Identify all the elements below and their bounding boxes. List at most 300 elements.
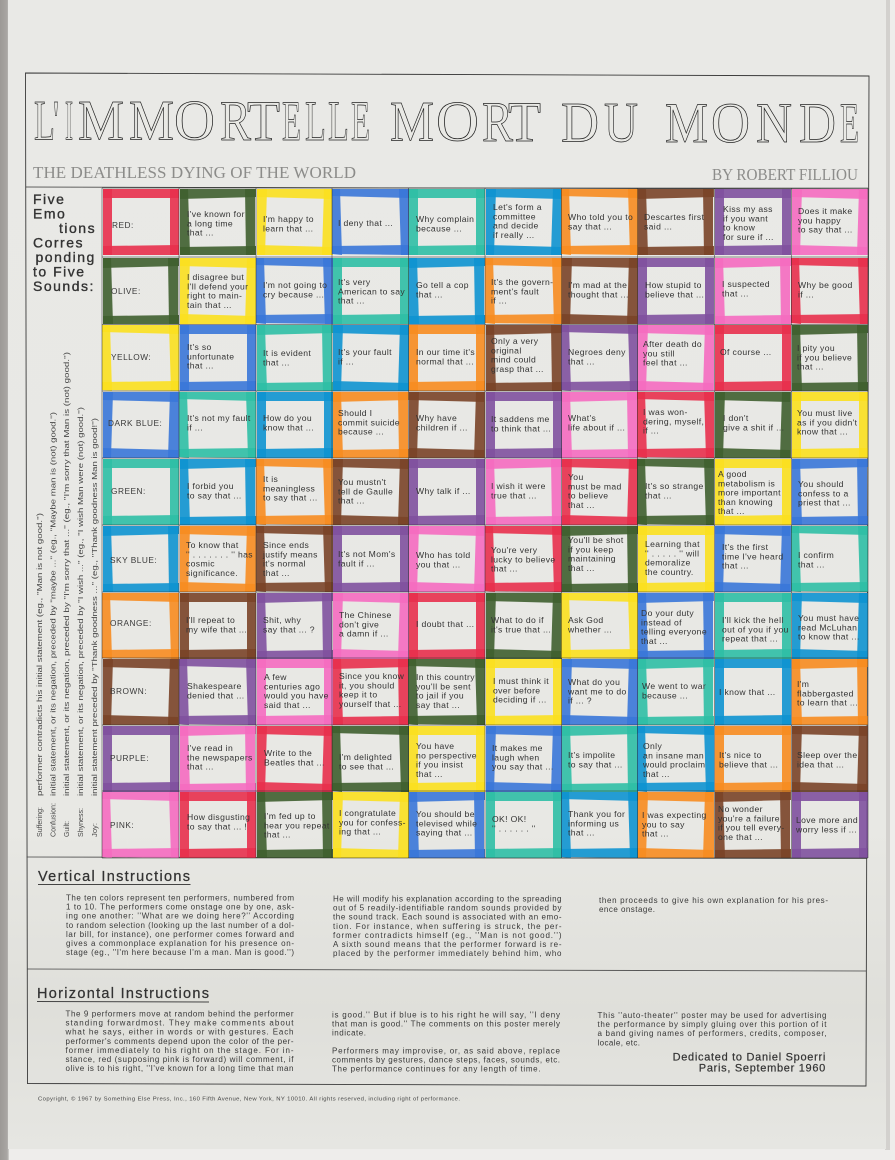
- tile: Since ends justify: that ...: [263, 568, 290, 578]
- tile: You must be mad: You: [568, 472, 584, 482]
- dedication: Paris, September 1960: [699, 1062, 826, 1074]
- title: D: [799, 92, 836, 155]
- tile: What do you want: What do you: [568, 677, 620, 687]
- tile: Shakespeare: Shakespeare: [187, 681, 242, 691]
- tile: You'll be shot: maintaining: [568, 554, 616, 564]
- tile: You're very lucky: that ...: [491, 564, 518, 574]
- tile: A good metabolism: more important: [718, 488, 781, 498]
- tile: It's not Mom's: [333, 526, 409, 592]
- tile: Sleep over the: idea that ...: [797, 759, 844, 769]
- tile: A few centuries: A few: [264, 672, 287, 682]
- tile: You must have read McLuhan: read McLuhan: [798, 622, 857, 632]
- tile: Negroes deny: [561, 325, 638, 391]
- tile: To know that: '' . . . . . . . '' has: [186, 549, 253, 559]
- title: T: [508, 91, 541, 154]
- tile: In this country: to jail if you: [416, 691, 464, 701]
- tile: I must think it: over before: [493, 685, 540, 695]
- tile: A few centuries: said that ...: [264, 700, 311, 710]
- tile: You're very lucky: lucky to believe: [491, 554, 556, 564]
- tile: Thank you for: informing us: [568, 818, 619, 828]
- tile: Love more and: [792, 792, 868, 858]
- tile: In our time: normal that ...: [416, 356, 474, 366]
- tile: Why complain: [409, 189, 485, 255]
- tile: I'm not going to: [256, 258, 333, 324]
- tile: You have no perspective: that ...: [416, 769, 443, 779]
- tile: You're very lucky: You're very: [491, 545, 538, 555]
- tile: Ask God: [561, 593, 638, 659]
- tile: Only a very original: grasp that ...: [491, 364, 544, 374]
- tile: I've read in: [180, 726, 256, 792]
- tile: Descartes first: Descartes first: [644, 212, 705, 222]
- tile: It is meaningless: meaningless: [263, 483, 315, 493]
- horizontal instructions: column 3: the performance by simply gluing over this portion of it: [598, 1020, 827, 1029]
- tile: Do your duty: [638, 593, 714, 659]
- tile: You mustn't tell: [333, 459, 409, 525]
- tile: Should I commit: [333, 392, 409, 458]
- tile: It saddens me: to think that ...: [491, 423, 551, 433]
- tile: Sleep over the: Sleep over the: [797, 750, 857, 760]
- vertical legend: five emotions: initial statement preceded by ''Thank goodness ...'' (eg., ''Thank goodness Man is good!''): [90, 417, 99, 796]
- vertical instructions: column 1: stage (eg., ''I'm here because I'm a man. Man is good.''): [66, 948, 294, 957]
- tile: YELLOW: YELLOW:: [111, 352, 151, 362]
- tile: It's so strange: [637, 459, 714, 525]
- tile: It's nice to: [715, 726, 791, 792]
- tile: It is evident: It is evident: [263, 348, 311, 358]
- tile: Why have children: Why have: [416, 413, 457, 423]
- vertical instructions: column 2: out of 5 readily-identifiable random sounds provided by: [333, 904, 562, 913]
- tile: I'll repeat to: I'll repeat to: [186, 615, 235, 625]
- tile: It saddens me: It saddens me: [491, 414, 550, 424]
- tile: In our time: In our time it's: [416, 347, 475, 357]
- tile: I must think it: I must think it: [493, 676, 549, 686]
- tile: Love more and: Love more and: [796, 815, 858, 825]
- tile: I pity you: that ...: [797, 362, 824, 372]
- tile: Should I commit: Should I: [338, 408, 372, 418]
- tile: I'm flabbergasted: [792, 659, 868, 725]
- tile: No wonder: [715, 792, 791, 858]
- tile: It makes me laugh: [486, 726, 562, 792]
- tile: I pity you: I pity you: [797, 343, 835, 353]
- tile: DARK BLUE: DARK BLUE:: [108, 418, 162, 428]
- tile: What's life about: life about if ...: [568, 422, 625, 432]
- tile: Learning that: '' . . . . . '' will: [645, 548, 699, 558]
- tile: It's the first: [715, 526, 791, 592]
- tile: Descartes first: said ...: [644, 221, 672, 231]
- title: M: [390, 90, 434, 154]
- tile: Of course: [715, 325, 791, 391]
- tile: I'm mad at the thought: I'm mad at the: [568, 280, 627, 290]
- tile: I'm delighted: I'm delighted: [339, 752, 392, 762]
- subtitle: THE DEATHLESS DYING OF THE WORLD: [33, 163, 356, 182]
- tile: We went to war: because ...: [642, 690, 688, 700]
- tile: To know that: To know that: [186, 540, 239, 550]
- tile: YELLOW: [102, 325, 179, 391]
- vertical legend: five emotions: Joy:: [90, 823, 99, 837]
- author: BY ROBERT FILLIOU: [712, 165, 858, 184]
- tile: You should confess: [792, 459, 868, 525]
- tile: I doubt that: [409, 593, 485, 659]
- horizontal instructions: column 2: Performers may improvise, or, as said above, replace: [332, 1046, 561, 1055]
- tile: I'm mad at the thought: thought that ...: [568, 289, 629, 299]
- frame edge: left shadow: [0, 0, 9, 1160]
- vertical legend: five emotions: performer contradicts his initial statement (eg., ''Man is not good.''): [35, 512, 44, 796]
- tile: It's impolite: It's impolite: [568, 750, 615, 760]
- title: O: [174, 90, 215, 152]
- side heading: [33, 191, 96, 294]
- tile: I'm fed up to: [257, 792, 333, 858]
- tile: It's the first: time I've heard: [722, 551, 784, 561]
- tile: I've known for: a long time: [187, 218, 233, 228]
- tile: Go tell a cop: [409, 258, 485, 324]
- tile: A good metabolism: that ...: [718, 506, 745, 516]
- tile: What's life about: [562, 392, 638, 458]
- tile: I wish it were: [486, 459, 562, 525]
- tile: GREEN: GREEN:: [111, 486, 146, 496]
- tile: I congratulate: you for confess-: [339, 817, 406, 827]
- tile: No wonder: if you tell every-: [718, 823, 785, 833]
- tile: The Chinese: don't give: [339, 619, 379, 629]
- tile: I deny that: I deny that ...: [338, 218, 393, 228]
- tile: I pity you: if you believe: [797, 352, 852, 362]
- tile: What's life about: What's: [568, 413, 596, 423]
- tile: Go tell a cop: Go tell a cop: [416, 280, 469, 290]
- tile: It makes me laugh: you say that ...: [492, 762, 554, 772]
- tile: It's the government's fault: ment's fault: [491, 286, 539, 296]
- tile: I'm not going to: cry because ...: [263, 289, 324, 299]
- tile: A few centuries: would you have: [263, 691, 329, 701]
- tile: I'm delighted: [332, 726, 409, 792]
- title: T: [247, 90, 280, 153]
- horizontal instructions: column 2: The performance continues for any length of time.: [332, 1064, 540, 1074]
- tile: Why be good: Why be good: [798, 280, 853, 290]
- tile: Only a very original: Only a very: [491, 336, 539, 346]
- tile: Let's form a committee: Let's form a: [493, 202, 542, 212]
- tile: It's so unfortunate: that ...: [187, 361, 214, 371]
- tile: I disagree but: [180, 258, 256, 324]
- divider: between instructions: [27, 969, 866, 971]
- title: E: [282, 90, 301, 153]
- tile: It's your fault: It's your fault: [338, 347, 392, 357]
- tile: ORANGE: ORANGE:: [110, 618, 152, 628]
- horizontal instructions: column 2: [332, 1010, 561, 1074]
- tile: Let's form a committee: and decide: [493, 221, 539, 231]
- tile: OLIVE: [103, 258, 179, 324]
- tile: How do you know: know that ...: [263, 422, 314, 432]
- tile: I'm happy to: [257, 189, 333, 255]
- tile: After death: [638, 325, 714, 391]
- horizontal instructions: column 3: locale, etc.: [598, 1038, 640, 1047]
- tile: It's nice to: believe that ...: [719, 759, 778, 769]
- side heading: to Five: [33, 264, 86, 280]
- tile: We went to war: [638, 659, 714, 725]
- tile: How disgusting: How disgusting: [187, 812, 250, 822]
- tile: I must think it: deciding if ...: [493, 695, 547, 705]
- tile: Who has told: Who has told: [416, 550, 470, 560]
- tile: You're very lucky: [485, 526, 562, 592]
- tile: How stupid to: How stupid to: [645, 280, 702, 290]
- tile: You should be televised: You should be: [416, 809, 475, 819]
- tile: Who has told: [409, 526, 485, 592]
- tile: Shit, why: Shit, why: [263, 615, 301, 625]
- tile: It's so strange: It's so strange: [645, 481, 704, 491]
- tile: Only an insane man: [637, 726, 714, 792]
- tile: I'm happy to: I'm happy to: [263, 214, 314, 224]
- vertical legend: five emotions: [35, 351, 99, 837]
- title: E: [840, 92, 859, 155]
- colour grid: [102, 189, 868, 858]
- tile: Kiss my ass: if you want: [723, 213, 768, 223]
- tile: You should confess: You should: [798, 479, 844, 489]
- tile: It's not my fault: It's not my fault: [187, 413, 251, 423]
- tile: Only an insane man: an insane man: [643, 750, 704, 760]
- heading: Horizontal Instructions: Horizontal Instructions: [37, 986, 209, 1002]
- tile: Why be good: [791, 258, 868, 324]
- horizontal instructions: column 1: performer's comments depend upon the color of the per-: [66, 1037, 294, 1046]
- horizontal instructions: column 2: is good.'' But if blue is to his right he will say, ''I deny: [332, 1010, 560, 1020]
- tile: I congratulate: ing that ...: [339, 827, 381, 837]
- tile: You mustn't tell: that ...: [338, 496, 365, 506]
- tile: It makes me laugh: It makes me: [492, 743, 543, 753]
- title: D: [561, 92, 599, 154]
- tile: In this country: say that ...: [416, 700, 460, 710]
- tile: You mustn't tell: You mustn't: [338, 477, 387, 487]
- tile: Do your duty: instead of: [641, 617, 682, 627]
- tile: How disgusting: [180, 792, 256, 858]
- tile: After death: feel that ...: [643, 358, 688, 368]
- tile: Do your duty: Do your duty: [641, 608, 694, 618]
- tile: A few centuries: [257, 659, 333, 725]
- tile: I wish it were: I wish it were: [491, 481, 546, 491]
- tile: It is evident: [257, 325, 333, 391]
- tile: It's so unfortunate: [180, 325, 256, 391]
- title: O: [711, 92, 750, 155]
- tile: I'm mad at the thought: [562, 258, 638, 324]
- vertical legend: five emotions: initial statement, or its negation, preceded by ''maybe ...'' (eg., ''Maybe man is (not) good.''): [48, 411, 58, 796]
- tile: What to do if: it's true that ...: [491, 624, 551, 634]
- vertical instructions: column 3: ence onstage.: [599, 905, 655, 914]
- horizontal instructions: column 1: standing forwardmost. They make comments about: [66, 1019, 294, 1028]
- tile: How do you know: [257, 392, 333, 458]
- tile: It's very American: It's very: [338, 277, 371, 287]
- tile: Since you know: keep it to: [339, 690, 377, 700]
- tile: You should be televised: saying that ...: [416, 828, 473, 838]
- vertical instructions: column 2: placed by the performer immediately behind him, who: [333, 949, 562, 958]
- side heading: Sounds:: [33, 278, 95, 294]
- tile: I forbid you: I forbid you: [187, 481, 234, 491]
- tile: Shit, why: [257, 593, 333, 659]
- vertical instructions: column 1: ing one another: ''What are we doing here?'' According: [66, 912, 294, 921]
- tile: I was wondering: dering, myself,: [643, 416, 704, 426]
- tile: You mustn't tell: tell de Gaulle: [338, 486, 393, 496]
- tile: It is meaningless: to say that ...: [263, 493, 318, 503]
- horizontal instructions: column 1: stance, red (supposing pink is forward) will comment, if: [66, 1055, 294, 1064]
- title: M: [78, 90, 124, 152]
- horizontal instructions: column 1: The 9 performers move at random behind the performer: [66, 1010, 294, 1018]
- tile: Love more and: worry less if ...: [795, 824, 857, 834]
- dedication: Dedicated to Daniel Spoerri: [673, 1052, 826, 1064]
- tile: RED: RED:: [112, 220, 134, 230]
- tile: It's very American: American to say: [338, 286, 405, 296]
- tile: I'll repeat to: [180, 593, 256, 659]
- title: R: [482, 91, 513, 154]
- tile: It's your fault: if ...: [338, 356, 354, 366]
- vertical legend: five emotions: initial statement, or its negation, preceded by ''I wish ...'' (eg., ''I wish Man were (not) good.''): [76, 406, 85, 796]
- tile: I've read in: I've read in: [187, 743, 233, 753]
- tile: You'll be shot: if you keep: [568, 544, 614, 554]
- title: L: [328, 90, 349, 153]
- tile: Kiss my ass: [715, 189, 791, 255]
- tile: How stupid to: [638, 258, 714, 324]
- tile: I forbid you: [180, 459, 256, 525]
- title: R: [220, 90, 251, 153]
- tile: You should be televised: [409, 792, 485, 858]
- tile: You have no perspective: You have: [416, 741, 454, 751]
- tile: Thank you for: that ...: [568, 828, 595, 838]
- vertical instructions: column 3: [599, 896, 828, 914]
- tile: Do your duty: telling everyone: [641, 627, 707, 637]
- tile: I forbid you: to say that ...: [187, 490, 242, 500]
- tile: PURPLE: [103, 726, 179, 792]
- tile: In this country: In this country: [416, 672, 475, 682]
- tile: Should I commit: because ...: [338, 427, 384, 437]
- tile: It makes me laugh: laugh when: [492, 752, 540, 762]
- tile: Descartes first: [638, 189, 714, 255]
- tile: Of course: Of course ...: [720, 347, 771, 357]
- tile: Shakespeare: [179, 659, 256, 725]
- tile: Thank you for: Thank you for: [568, 809, 625, 819]
- tile: It is evident: that ...: [263, 357, 290, 367]
- tile: What do you want: want me to do: [567, 686, 627, 696]
- tile: It's impolite: to say that ...: [568, 759, 623, 769]
- title: L: [34, 90, 55, 152]
- vertical instructions: column 1: 1 to 10. The performers come onstage one by one, ask-: [66, 903, 294, 912]
- tile: Why have children: [409, 392, 485, 458]
- tile: Only a very original: original: [491, 345, 522, 355]
- horizontal instructions: column 2: that man is good.'' The comments on this poster merely: [332, 1020, 560, 1029]
- tile: I was expecting: you to say: [642, 819, 685, 829]
- tile: OK! OK!: [486, 792, 562, 858]
- tile: ORANGE: [102, 593, 179, 659]
- vertical instructions: column 1: gives a commonplace explanation for his presence on-: [66, 939, 294, 948]
- tile: You must live: You must live: [797, 408, 852, 418]
- tile: I was wondering: [637, 392, 714, 458]
- tile: Since you know: [333, 659, 409, 725]
- tile: How do you know: How do you: [263, 413, 312, 423]
- vertical instructions: column 1: [66, 894, 294, 957]
- tile: Why complain: Why complain: [416, 214, 474, 224]
- tile: You must live: [792, 392, 868, 458]
- tile: It's not Mom's: fault if ...: [338, 558, 375, 568]
- tile: It's not Mom's: It's not Mom's: [338, 549, 396, 559]
- tile: It is meaningless: It is: [263, 474, 278, 484]
- tile: PURPLE: PURPLE:: [110, 753, 149, 763]
- horizontal instructions: column 3: [598, 1011, 827, 1047]
- tile: After death: you still: [643, 348, 675, 358]
- tile: After death: After death do: [643, 339, 702, 349]
- tile: I know that: I know that ...: [719, 687, 776, 697]
- side heading: Emo: [33, 206, 66, 222]
- tile: You have no perspective: if you insist: [416, 760, 463, 770]
- tile: Only an insane man: would proclaim: [642, 760, 705, 770]
- tile: You should be televised: televised while: [416, 818, 477, 828]
- tile: It is meaningless: [256, 459, 333, 525]
- tile: Kiss my ass: Kiss my ass: [723, 204, 773, 214]
- tile: It's so unfortunate: It's so: [187, 342, 212, 352]
- tile: I've known for: I've known for: [187, 209, 245, 219]
- tile: I'm fed up to: I'm fed up to: [264, 811, 316, 821]
- tile: To know that: [180, 526, 256, 592]
- tile: Since ends justify: justify means: [262, 549, 318, 559]
- side heading: Corres: [33, 234, 84, 250]
- vertical legend: five emotions: Suffering:: [35, 807, 44, 837]
- tile: It's the first: It's the first: [722, 542, 769, 552]
- tile: I don't give: I don't: [723, 413, 749, 423]
- vertical legend: five emotions: Guilt:: [62, 821, 71, 837]
- dedication: [673, 1052, 826, 1074]
- horizontal instructions: column 1: former immediately to his right on the stage. For in-: [66, 1046, 294, 1055]
- tile: You must be mad: [562, 459, 638, 525]
- tile: A few centuries: centuries ago: [264, 681, 320, 691]
- tile: Ask God: Ask God: [568, 615, 603, 625]
- tile: What do you want: if ... ?: [568, 696, 592, 706]
- vertical legend: five emotions: initial statement, or its negation, preceded by ''I'm sorry that ...'' (eg., ''I'm sorry that Man is (not) good.''): [62, 351, 71, 796]
- tile: It's so unfortunate: unfortunate: [187, 351, 234, 361]
- tile: A good metabolism: than knowing: [718, 497, 773, 507]
- tile: Why talk if: Why talk if ...: [416, 486, 471, 496]
- tile: To know that: cosmic: [186, 559, 215, 569]
- tile: I'm fed up to: hear you repeat: [264, 820, 330, 830]
- tile: OLIVE: OLIVE:: [111, 286, 141, 296]
- tile: Does it make: you happy: [798, 215, 841, 225]
- tile: I confirm: [791, 526, 868, 592]
- tile: DARK BLUE: [103, 392, 179, 458]
- tile: It's the government's fault: [485, 258, 562, 324]
- tile: The Chinese: The Chinese: [339, 610, 392, 620]
- vertical instructions: column 2: [333, 894, 562, 958]
- tile: Why be good: if ...: [798, 289, 814, 299]
- tile: I confirm: that ...: [798, 559, 825, 569]
- tile: I suspected: I suspected: [722, 279, 770, 289]
- title: M: [665, 92, 708, 155]
- title: U: [604, 92, 638, 154]
- copyright: Copyright, © 1967 by Something Else Press, Inc., 160 Fifth Avenue, New York, NY 10010. All rights reserved, including right of performance.: [38, 1096, 460, 1102]
- tile: Who told you to: [561, 189, 638, 255]
- tile: Does it make: [792, 189, 868, 255]
- tile: You must have read McLuhan: You must have: [798, 613, 859, 623]
- tile: The Chinese: a damn if ...: [339, 629, 389, 639]
- tile: Do your duty: that ...: [641, 636, 668, 646]
- tile: It's nice to: It's nice to: [719, 750, 762, 760]
- tile: I was expecting: [638, 792, 714, 858]
- frame edge: right shadow: [885, 0, 890, 1150]
- tile: It's so strange: that ...: [645, 490, 672, 500]
- tile: You must be mad: must be mad: [568, 481, 622, 491]
- tile: I'll repeat to: my wife that ...: [186, 624, 247, 634]
- horizontal instructions: column 1: [64, 1010, 294, 1073]
- tile: It's your fault: [333, 325, 409, 391]
- tile: I'm fed up to: that ...: [264, 830, 291, 840]
- tile: I've read in: that ...: [187, 762, 214, 772]
- tile: You have no perspective: no perspective: [416, 750, 477, 760]
- tile: Only a very original: mind could: [491, 355, 536, 365]
- vertical instructions: column 2: tion. For instance, when suffering is struck, the per-: [333, 922, 562, 931]
- tile: It's impolite: [562, 726, 638, 792]
- tile: Learning that: [638, 526, 714, 592]
- tile: Who told you to: say that ...: [568, 221, 612, 231]
- tile: Let's form a committee: committee: [493, 211, 536, 221]
- tile: Write to the Beatles: Write to the: [264, 748, 312, 758]
- tile: Ask God: whether ...: [567, 624, 612, 634]
